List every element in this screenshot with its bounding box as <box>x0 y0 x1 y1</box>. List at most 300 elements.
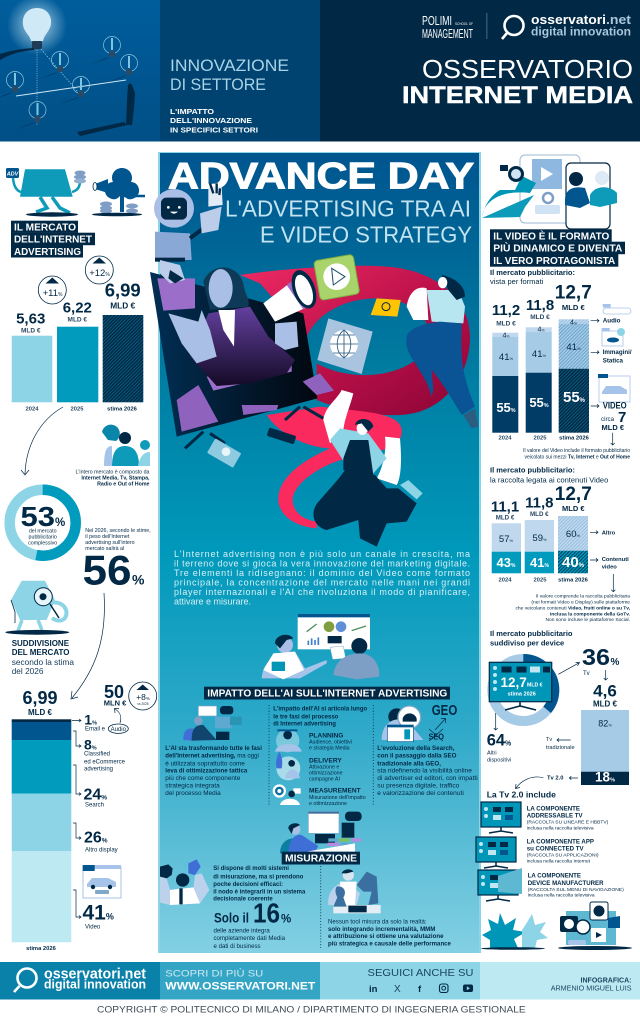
stat: 6,99 mld <box>22 688 58 717</box>
subheading: raccolta contenuti video: la raccolta legata ai contenuti Video <box>490 476 608 484</box>
bar chart: internet advertising: MLD € <box>110 300 136 310</box>
subheading: suddiviso per device: Il mercato pubblicitario <box>490 629 573 638</box>
stacked bar chart: formati: MLD € <box>562 303 585 312</box>
item: device manufacturer: (RACCOLTA SUL MENU DI NAVIGAZIONE) <box>528 887 624 893</box>
arrow: dal grafico alla quota <box>21 407 63 475</box>
text: evoluzione della search: su presenza digitale, traffico <box>377 783 460 790</box>
text: evoluzione della search: L'evoluzione della Search, <box>377 745 455 752</box>
text: planning <box>309 733 352 751</box>
title: advance day: E VIDEO STRATEGY <box>260 222 472 248</box>
text: introduzione centrale: principale, la concentrazione del mercato nelle mani nei grandi <box>174 578 470 588</box>
text: evoluzione della search: sta ridefinendo la visibilità online <box>377 768 472 775</box>
icon: persona con lente SEO/GEO <box>382 706 423 742</box>
label: 8% classified: advertising <box>84 767 113 773</box>
text: measurement: Misurazione dell'impatto <box>309 795 366 801</box>
stacked bar chart: formati: 4% <box>537 326 545 334</box>
text: measurement: e ottimizzazione <box>309 801 347 807</box>
legend: immagini statica: Immagini/ <box>603 349 632 356</box>
subheading: suddiviso per device: suddiviso per device <box>490 639 564 648</box>
text: delivery: ottimizzazione <box>309 771 343 777</box>
label: GEO e SEO <box>428 703 457 741</box>
bar: tv tradizionale e 2.0: 18% <box>595 770 615 785</box>
text: evoluzione della search: tradizionale alla GEO, <box>377 760 441 767</box>
footer band <box>0 962 640 1000</box>
stacked bar chart: formati: 41% <box>499 352 514 363</box>
heading: il video è il formato: PIÙ DINAMICO E DIVENTA <box>493 242 622 254</box>
donut chart: 53%: del mercato <box>29 529 57 535</box>
text: nessun tool: più strategica e causale delle performance <box>328 941 452 948</box>
text: evoluzione della search <box>377 745 478 797</box>
text: planning: e strategia Media <box>309 745 350 751</box>
text: nessun tool: solo integrando incrementalità, MMM <box>328 926 435 933</box>
stacked bar chart: contenuti video: 11,1 <box>491 499 519 516</box>
donut chart: device: stima 2026 <box>508 692 536 698</box>
text: impatto dell'innovazione: IN SPECIFICI SETTORI <box>170 126 258 134</box>
stat: 50 mln audio: MLN € <box>104 698 127 708</box>
heading: innovazione di settore <box>170 56 289 94</box>
item: addressable tv: LA COMPONENTE <box>527 806 580 813</box>
text: intero mercato composto <box>75 469 150 487</box>
logo: osservatori.net digital innovation: osservatori <box>531 12 606 27</box>
logo: Polimi school of management: SCHOOL OF <box>455 21 473 26</box>
item: app su connected tv: (RACCOLTA SU APPLICAZIONI) <box>527 852 599 858</box>
credits: infografica <box>480 962 640 1000</box>
stacked bar chart: formati: 2025 <box>534 435 547 441</box>
label: 1% email e audio: Email e <box>85 727 106 733</box>
item: addressable tv: (RACCOLTA SU LINEARE E HBBTV) <box>527 819 609 825</box>
text: impatto AI tre fasi <box>273 707 367 728</box>
arrow: verso altri dispositivi <box>494 713 498 730</box>
text: delivery: Attivazione e <box>309 765 339 771</box>
text: delivery <box>309 757 343 783</box>
label: 8% classified: ed eCommerce <box>84 759 126 765</box>
item: addressable tv: inclusa nella raccolta televisiva <box>527 825 594 831</box>
heading: suddivisione del mercato: SUDDIVISIONE <box>12 639 70 648</box>
text: delivery: DELIVERY <box>309 757 342 764</box>
label: 1% email e audio: 1% <box>84 711 97 727</box>
logo: osservatori.net digital innovation <box>486 12 632 39</box>
bar: tv tradizionale e 2.0: 82% <box>598 719 612 729</box>
donut chart: 53% <box>10 490 76 556</box>
heading: suddivisione del mercato: DEL MERCATO <box>12 648 69 657</box>
note: raccolta: (nei formati Video e Display) sulle piattaforme <box>531 600 630 606</box>
text: peso internet advertising <box>85 528 151 552</box>
donut chart: 53%: pubblicitario <box>29 535 57 541</box>
legend: audio: Audio <box>603 317 621 324</box>
text: introduzione centrale <box>174 549 470 606</box>
stacked bar chart: contenuti video: 59% <box>532 533 547 544</box>
heading: il video è il formato: IL VERO PROTAGONISTA <box>493 256 615 267</box>
stacked bar chart: formati: 55% <box>496 400 516 415</box>
subheading: raccolta contenuti video: Il mercato pubblicitario: <box>490 465 575 474</box>
arrow: nota video <box>611 433 615 445</box>
illustration: ADV character and tree with coins: ADV <box>6 172 20 178</box>
legend: altro e contenuti video: Altro <box>602 530 616 536</box>
stacked bar: suddivisione 2026 <box>12 719 71 952</box>
bar chart: internet advertising: MLD € <box>21 328 41 335</box>
stacked bar chart: contenuti video: 41% <box>530 555 550 570</box>
stacked bar chart: contenuti video: MLD € <box>530 511 549 518</box>
text: planning: Audience, obiettivi <box>309 739 352 745</box>
item: device manufacturer: LA COMPONENTE <box>528 873 581 880</box>
link: scopri di più: WWW.OSSERVATORI.NET <box>165 980 316 992</box>
heading: il video è il formato: IL VIDEO È IL FORMATO <box>493 231 610 242</box>
text: AI ottimizzazione tattica <box>165 745 262 797</box>
bar chart: internet advertising: MLD € <box>68 317 87 324</box>
heading: il mercato dell'internet advertising <box>11 221 95 258</box>
bar chart: internet advertising: stima 2026 <box>107 407 138 413</box>
credits: infografica: ARMENIO MIGUEL LUIS <box>551 983 632 992</box>
stacked bar chart: contenuti video: 43% <box>497 555 516 570</box>
logo: Polimi school of management: POLIMI <box>422 13 452 28</box>
panel: header illustration with light bulbs <box>0 0 160 142</box>
legend: video circa 7 mld <box>591 374 630 432</box>
heading: innovazione di settore: INNOVAZIONE <box>170 56 289 75</box>
stat: solo il 16%: Solo il <box>214 911 249 926</box>
heading: il video è il formato <box>490 229 625 267</box>
illustration: TV, woman with megaphone, robot and characters <box>150 183 478 547</box>
stacked bar chart: formati <box>492 282 592 441</box>
stacked bar chart: contenuti video: 2024 <box>499 578 512 584</box>
stat: 50 mln audio: vs 2025 <box>137 702 149 706</box>
legend: video circa 7 mld: VIDEO <box>603 400 627 410</box>
subheading: raccolta contenuti video <box>490 465 608 484</box>
link: scopri di più <box>160 962 320 1000</box>
text: nessun tool: Nessun tool misura da solo la realtà: <box>328 918 427 925</box>
item: addressable tv <box>481 802 609 833</box>
heading: la tv 2.0 include: La Tv 2.0 include <box>487 789 556 799</box>
credits: infografica: INFOGRAFICA: <box>581 978 632 985</box>
badge: +11%: +11% <box>43 288 63 299</box>
stacked bar chart: formati: 4% <box>570 320 577 326</box>
stat: 50 mln audio: 50 <box>104 682 124 702</box>
logo: osservatori.net digital innovation: digital innovation <box>531 24 631 38</box>
title: osservatorio internet media: OSSERVATORIO <box>422 54 633 84</box>
bar chart: internet advertising: 5,63 <box>16 310 45 327</box>
title: advance day <box>168 155 474 248</box>
panel: AI column 3 - GEO <box>377 703 478 797</box>
copyright: COPYRIGHT © POLITECNICO DI MILANO / DIPARTIMENTO DI INGEGNERIA GESTIONALE <box>97 1004 526 1014</box>
text: evoluzione della search: e valorizzazione dei contenuti <box>377 790 464 797</box>
text: AI ottimizzazione tattica: è utilizzata soprattutto come <box>165 760 245 767</box>
item: app su connected tv: su CONNECTED TV <box>527 846 585 853</box>
label: 24% search: Search <box>85 803 104 809</box>
icon: persona con scacchi <box>328 869 381 913</box>
legend: video circa 7 mld: 7 <box>618 409 626 426</box>
stat: 64% altri dispositivi: Altri <box>487 750 497 756</box>
logo: osservatori.net digital innovation: .net <box>606 12 632 27</box>
logo: Polimi school of management <box>422 13 473 41</box>
stacked bar chart: formati: 4% <box>502 332 510 340</box>
stacked bar chart: formati: 55% <box>563 389 586 406</box>
legend: altro e contenuti video: video <box>602 564 617 570</box>
subheading: vista per formati: vista per formati <box>490 277 544 286</box>
arrow: verso suddivisione <box>71 593 104 699</box>
donut chart: device <box>489 659 554 721</box>
stat: 64% altri dispositivi: dispositivi <box>487 758 511 764</box>
arrow: nota contenuti <box>611 574 615 592</box>
stacked bar: suddivisione 2026: stima 2026 <box>26 946 57 952</box>
stacked bar chart: formati: MLD € <box>530 314 550 321</box>
icon: adv auto <box>83 865 121 898</box>
donut chart: 53%: % <box>55 517 65 529</box>
stat: 50 mln audio: +8% <box>136 692 150 702</box>
badge: +12%: +12% <box>89 268 110 279</box>
text: peso internet advertising: advertising sull'intero <box>85 540 135 546</box>
stacked bar chart: formati: 2024 <box>499 435 512 441</box>
stat: solo il 16% <box>214 898 291 929</box>
bar chart: internet advertising <box>12 280 143 413</box>
subheading: suddiviso per device <box>490 629 573 648</box>
donut chart: device: 12,7 <box>500 675 527 690</box>
text: introduzione centrale: Tre elementi la ridisegnano: il dominio del Video come formato <box>174 568 470 578</box>
bar chart: internet advertising: 6,22 <box>63 299 92 316</box>
bar: tv tradizionale e 2.0 <box>581 682 629 785</box>
text: evoluzione della search: di advertiser ed editori, con impatti <box>377 775 478 782</box>
note: raccolta: Il valore comprende la raccolta pubblicitaria <box>536 594 630 600</box>
legend: altro e contenuti video: Contenuti <box>602 557 629 563</box>
text: planning: PLANNING <box>309 733 343 740</box>
donut chart: 53%: complessivo <box>28 541 57 547</box>
stat: 36% tv: 36 <box>582 644 610 670</box>
text: impatto AI tre fasi: le tre fasi del processo <box>273 714 339 720</box>
label: tv tradizionale: Tv <box>546 737 552 743</box>
logo: footer osservatori <box>0 962 160 1000</box>
label: 8% classified: 8% <box>84 736 97 752</box>
label: 8% classified: Classified <box>84 752 110 758</box>
label: 41% video: Video <box>85 924 101 930</box>
icon: measurement <box>273 784 301 805</box>
arrow: verso 4,6 mld <box>604 670 608 680</box>
link: scopri di più: SCOPRI DI PIÙ SU <box>165 969 263 980</box>
text: aziende integra dati: delle aziende integra <box>214 928 270 935</box>
item: addressable tv: ADDRESSABLE TV <box>527 813 583 820</box>
stacked bar chart: formati: 55% <box>529 395 549 410</box>
item: app su connected tv: LA COMPONENTE APP <box>527 838 594 845</box>
icon: planning <box>275 729 302 752</box>
heading: suddivisione del mercato: secondo la stima <box>12 657 74 667</box>
connectors: etichette barra <box>72 719 81 918</box>
label: 8% classified <box>84 736 126 773</box>
stacked bar chart: formati: 12,7 <box>555 282 592 303</box>
text: aziende integra dati: completamente dati Media <box>214 935 286 942</box>
text: AI ottimizzazione tattica: strategica integrata <box>165 783 220 790</box>
bar chart: internet advertising: 2024 <box>26 407 39 413</box>
panel: central column background <box>158 152 481 953</box>
header band <box>0 0 640 142</box>
label: tv tradizionale <box>546 737 575 751</box>
bar chart: internet advertising: 2025 <box>71 407 84 413</box>
icon: delivery <box>276 752 300 780</box>
icon: persona al computer con robot <box>183 706 242 741</box>
panel: misurazione sinistra <box>160 859 306 950</box>
illustration: persone e smartphone con video <box>482 155 617 232</box>
text: delivery: campagne AI <box>309 777 340 783</box>
panel: mercato internet advertising (left column) <box>5 168 157 952</box>
stat: solo il 16%: 16 <box>253 898 280 929</box>
stacked bar chart: contenuti video: 57% <box>499 534 514 545</box>
text: impatto dell'innovazione: L'IMPATTO <box>170 107 214 116</box>
text: nessun tool: e attribuzione si ottiene una valutazione <box>328 933 444 940</box>
text: sistemi di misurazione: di misurazione, ma si prendono <box>213 874 304 880</box>
legend: immagini statica: Statica <box>603 357 624 364</box>
text: AI ottimizzazione tattica: L'AI sta trasformando tutte le fasi <box>165 745 262 752</box>
text: peso internet advertising: mercato salirà al <box>85 546 124 552</box>
stat: 6,99 mld: MLD € <box>28 708 53 717</box>
text: impatto AI tre fasi: di Internet advertising <box>273 722 336 728</box>
title: osservatorio internet media <box>402 54 633 109</box>
text: aziende integra dati <box>214 928 286 950</box>
title: advance day: ADVANCE DAY <box>168 155 474 196</box>
badge: +11% <box>38 276 66 304</box>
stacked bar chart: contenuti video: 11,8 <box>525 495 553 512</box>
subheading: vista per formati <box>490 268 575 286</box>
label: tv tradizionale: tradizionale <box>546 745 575 751</box>
text: measurement <box>309 787 366 807</box>
note: raccolta: Non sono incluse le piattaforme Social. <box>545 617 630 623</box>
text: peso internet advertising: Nel 2026, secondo le stime, <box>85 528 151 534</box>
heading: il mercato dell'internet advertising: DELL'INTERNET <box>14 234 92 246</box>
text: introduzione centrale: il terreno dove si gioca la vera innovazione del marketing digitale. <box>174 558 470 568</box>
stat: 64% altri dispositivi: 64% <box>487 732 512 750</box>
logo: Polimi school of management: MANAGEMENT <box>422 26 473 41</box>
note: raccolta <box>515 594 631 623</box>
heading: misurazione: MISURAZIONE <box>285 854 358 865</box>
item: device manufacturer <box>478 868 624 901</box>
social links: f <box>418 984 422 995</box>
text: AI ottimizzazione tattica: dell'Internet advertising, ma oggi <box>165 753 259 760</box>
item: app su connected tv <box>476 837 599 868</box>
text: introduzione centrale: player internazionali e l'AI che rivoluziona il modo di pianificare, <box>174 587 470 597</box>
label: 26% altro display: 26% <box>84 830 108 847</box>
legend: immagini statica <box>591 328 632 364</box>
arrow: verso Tv 2.0 include <box>516 777 543 788</box>
stacked bar chart: contenuti video: 40% <box>562 554 585 571</box>
stat: 36% tv <box>582 644 620 677</box>
note: raccolta: inclusa la componente della GoTv. <box>550 611 631 617</box>
text: introduzione centrale: L'Internet advertising non è più solo un canale in crescita, ma <box>174 549 470 559</box>
legend: video circa 7 mld: circa <box>601 416 615 423</box>
label: tv 2.0: Tv 2.0 <box>547 775 563 781</box>
social links: X <box>394 984 401 995</box>
text: evoluzione della search: con il passaggio dalla SEO <box>377 753 457 760</box>
stacked bar chart: contenuti video <box>491 484 592 584</box>
panel: AI column 1 <box>165 706 262 797</box>
panel: misurazione destra <box>328 869 452 948</box>
subheading: vista per formati: Il mercato pubblicitario: <box>490 268 575 277</box>
icon: gruppo di media <box>102 425 150 466</box>
label: 26% altro display: Altro display <box>85 848 118 854</box>
badge: +12% <box>85 256 113 284</box>
stat: 50 mln audio <box>104 682 157 710</box>
heading: impatto dell'AI: IMPATTO DELL'AI SULL'INTERNET ADVERTISING <box>207 689 447 700</box>
stat: 64% altri dispositivi <box>487 732 512 764</box>
panel: video (right column) <box>476 155 632 950</box>
heading: suddivisione del mercato <box>12 639 74 676</box>
item: device manufacturer: DEVICE MANUFACTURER <box>528 880 604 887</box>
logo: footer osservatori: osservatori.net <box>44 966 146 982</box>
stacked bar chart: formati: 41% <box>566 342 581 353</box>
text: sistemi di misurazione: il nodo è integrarli in un sistema <box>213 889 306 895</box>
note: raccolta: che veicolano contenuti Video, fruiti online o su Tv, <box>515 606 631 612</box>
label: 1% email e audio: Audio <box>111 727 127 733</box>
label: GEO e SEO: SEO <box>428 732 444 741</box>
illustration: dispositivi e contenuti <box>558 902 632 950</box>
heading: il mercato dell'internet advertising: IL MERCATO <box>14 222 76 234</box>
legend: video circa 7 mld: MLD € <box>602 423 625 432</box>
bar: tv tradizionale e 2.0: MLD € <box>593 700 618 709</box>
label: 24% search: 24% <box>84 786 107 803</box>
label: 1% email e audio <box>84 711 128 733</box>
stacked bar chart: formati: MLD € <box>496 321 516 328</box>
stacked bar chart: formati: 11,2 <box>492 302 520 319</box>
legend: altro e contenuti video <box>590 530 629 570</box>
stat: solo il 16%: % <box>281 914 291 926</box>
donut chart: 53%: 53 <box>20 501 55 532</box>
stat: 56%: % <box>132 572 145 588</box>
arrow: da audio a 50 mln <box>114 708 121 723</box>
label: GEO e SEO: GEO <box>432 703 457 719</box>
label: 26% altro display <box>84 830 118 854</box>
stacked bar chart: contenuti video: MLD € <box>562 504 585 513</box>
panel: AI column 2 - tre fasi <box>273 707 367 807</box>
illustration: misurazione persona al computer <box>280 812 362 853</box>
heading: il mercato dell'internet advertising: ADVERTISING <box>14 247 81 258</box>
illustration: dashboard e persone <box>262 614 379 679</box>
stat: 6,99 mld: 6,99 <box>22 688 58 708</box>
stacked bar chart: contenuti video: 60% <box>566 529 581 540</box>
stat: 36% tv: Tv <box>583 671 590 677</box>
text: nessun tool <box>328 918 452 948</box>
social links <box>320 962 480 1000</box>
illustration: ADV character and tree with coins <box>6 168 145 217</box>
text: AI ottimizzazione tattica: leva di ottimizzazione tattica <box>165 768 248 775</box>
stacked bar chart: formati: 41% <box>532 349 547 360</box>
text: impatto AI tre fasi: L'impatto dell'AI si articola lungo <box>273 707 367 713</box>
item: app su connected tv: inclusa nella raccolta Internet <box>527 859 591 865</box>
bar: tv tradizionale e 2.0: 4,6 <box>593 682 617 701</box>
heading: suddivisione del mercato: del 2026 <box>12 666 44 676</box>
text: sistemi di misurazione: Si dispone di molti sistemi <box>213 866 289 872</box>
text: AI ottimizzazione tattica: del processo Media <box>165 790 221 797</box>
stat: 36% tv: % <box>610 657 620 668</box>
note: valore del video: Il valore del Video include il formato pubblicitario <box>523 448 630 454</box>
text: intero mercato composto: Radio e Out of Home <box>97 481 150 487</box>
title: advance day: L'ADVERTISING TRA AI <box>225 196 471 222</box>
stacked bar chart: formati: 11,8 <box>526 297 554 314</box>
text: sistemi di misurazione: poche decisioni efficaci: <box>213 882 283 888</box>
stacked bar chart: contenuti video: 12,7 <box>555 484 592 505</box>
text: aziende integra dati: e dati di business <box>214 943 261 950</box>
text: intero mercato composto: Internet Media, Tv, Stampa, <box>81 475 150 481</box>
title: osservatorio internet media: INTERNET MEDIA <box>402 82 633 109</box>
text: sistemi di misurazione: decisionale coerente <box>213 897 273 903</box>
text: impatto dell'innovazione <box>170 107 258 134</box>
stacked bar chart: contenuti video: stima 2026 <box>558 578 589 584</box>
icon: personaggio con lente <box>5 581 69 635</box>
stacked bar chart: contenuti video: MLD € <box>496 514 515 521</box>
logo: footer osservatori: digital innovation <box>44 978 146 992</box>
note: valore del video <box>523 448 630 460</box>
heading: innovazione di settore: DI SETTORE <box>170 75 266 94</box>
item: device manufacturer: inclusa nella raccolta televisiva <box>528 893 595 899</box>
label: tv 2.0 <box>547 775 578 781</box>
text: intero mercato composto: L'intero mercato è composto da <box>75 469 150 475</box>
social links: in <box>369 984 378 995</box>
illustration: personaggi stella <box>481 913 548 950</box>
stacked bar chart: contenuti video: 2025 <box>534 578 547 584</box>
text: impatto dell'innovazione: DELL'INNOVAZIONE <box>170 116 252 125</box>
